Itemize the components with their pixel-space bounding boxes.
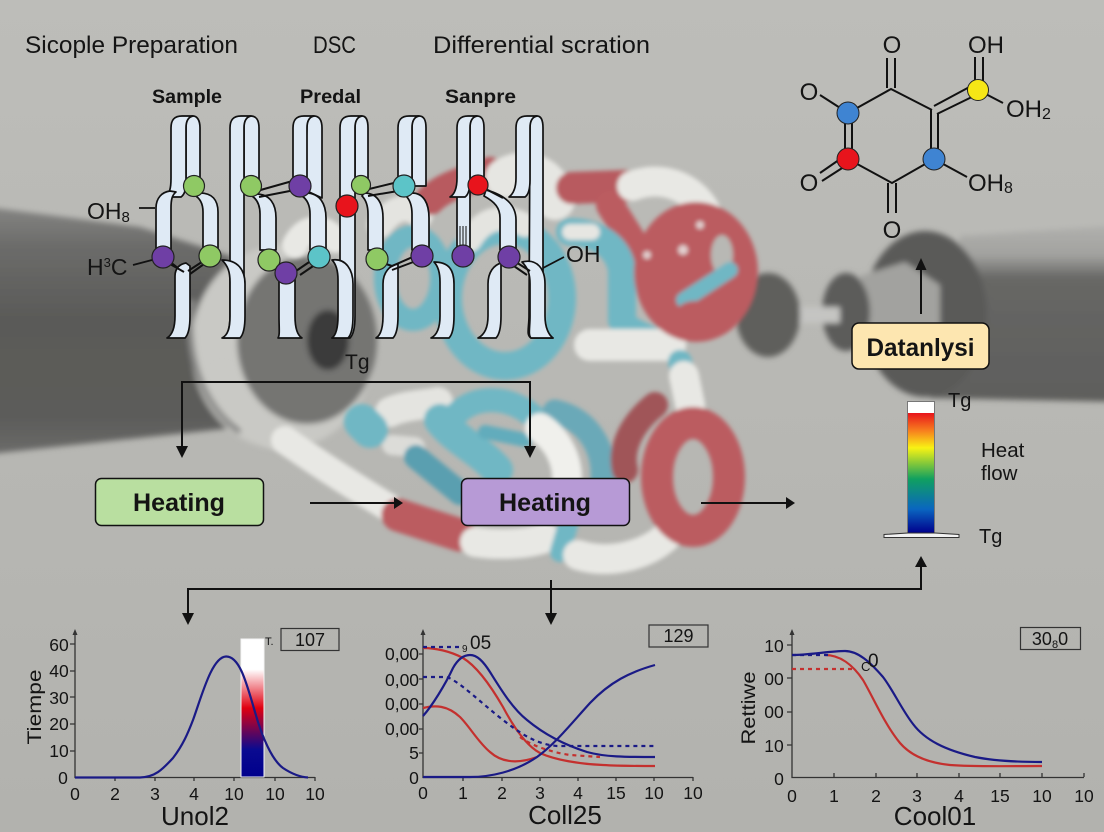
label: Tg bottom: Tg — [979, 526, 1002, 548]
label: O bottom: O — [883, 217, 901, 244]
label: Tg centre: Tg — [345, 351, 370, 374]
atoms — [152, 175, 520, 284]
curve — [75, 656, 308, 778]
y tick labels: 0 — [409, 768, 419, 788]
y tick labels: 40 — [49, 661, 69, 681]
x tick labels — [418, 783, 703, 803]
y axis title: Rettiwe — [739, 672, 760, 744]
y tick labels: 20 — [49, 714, 69, 734]
x tick labels: 3 — [150, 784, 160, 804]
box: heating green — [96, 478, 264, 526]
chart 2: Coll25 — [385, 625, 708, 830]
column base — [884, 533, 959, 538]
label: OH2 right: 2 — [1042, 106, 1051, 123]
y tick labels — [49, 635, 69, 788]
label: OH group left: OH — [87, 198, 122, 224]
heading row — [25, 32, 650, 59]
y tick labels: 10 — [764, 636, 784, 656]
x tick labels: 10 — [305, 784, 325, 804]
x tick labels: 4 — [573, 783, 583, 803]
label: OH group right: OH — [566, 241, 600, 267]
label: H3C group: H — [87, 254, 104, 280]
top strands — [164, 116, 553, 338]
box: heating green: Heating — [133, 489, 225, 517]
x tick labels: 4 — [954, 786, 964, 806]
y tick labels: 10 — [764, 736, 784, 756]
value box 107 — [281, 628, 339, 650]
value box 3080 — [1020, 628, 1080, 651]
y tick labels — [764, 636, 784, 789]
x tick labels: 10 — [224, 784, 244, 804]
curves — [792, 651, 1042, 762]
label: OH3 lower right: OH — [968, 170, 1004, 197]
value box 3080: 8 — [1052, 639, 1058, 651]
x tick labels: 10 — [1032, 786, 1052, 806]
box: heating purple: Heating — [499, 489, 591, 517]
y tick labels: 0 — [58, 768, 68, 788]
x tick labels: 3 — [535, 783, 545, 803]
x tick labels: 15 — [606, 783, 626, 803]
x tick labels: 1 — [829, 786, 839, 806]
box: heating purple — [462, 478, 630, 526]
value box 129: 129 — [663, 626, 694, 646]
box: data analysis: Datanlysi — [866, 334, 974, 362]
arrow: green heating to purple heating — [310, 497, 403, 509]
axes — [419, 632, 693, 781]
annotation C: C — [861, 659, 870, 674]
x tick labels: 10 — [644, 783, 664, 803]
label: OH3 lower right: 8 — [1004, 180, 1013, 197]
x axis title: Unol2 — [161, 801, 229, 831]
label: heat flow: flow — [981, 462, 1018, 485]
x tick labels: 10 — [683, 783, 703, 803]
chart 3: Cool01 — [739, 628, 1094, 831]
annotation 05: 05 — [470, 633, 491, 654]
x tick labels: 4 — [189, 784, 199, 804]
label: heat flow: Heat — [981, 439, 1024, 462]
y tick labels: 0,00 — [385, 670, 419, 690]
atoms — [837, 102, 859, 124]
heading: differential scration: Differential scration — [433, 32, 650, 59]
value box 107: 107 — [295, 630, 325, 650]
marker T.: T. — [265, 636, 274, 648]
label: sample: Sample — [152, 87, 222, 108]
label: O left: O — [800, 79, 818, 106]
annotation small 9: 9 — [462, 644, 468, 655]
y tick labels — [385, 644, 419, 788]
x tick labels: 0 — [787, 786, 797, 806]
x tick labels: 2 — [871, 786, 881, 806]
label: H3C group: 3 — [104, 255, 111, 270]
heading: sample preparation: Sicople Preparation — [25, 32, 238, 59]
flow connector: bottom rail to charts — [182, 556, 927, 625]
y tick labels: 0 — [774, 769, 784, 789]
value box 3080: 30 — [1032, 629, 1052, 649]
label: sanpre: Sanpre — [445, 87, 516, 108]
chart 1: Unol2 — [25, 628, 339, 831]
x tick labels: 3 — [912, 786, 922, 806]
heat flow colour column — [884, 390, 1025, 548]
value box 129 — [649, 625, 708, 647]
bonds — [820, 57, 1003, 213]
y tick labels: 00 — [764, 702, 784, 722]
background: right instrument cylinder — [736, 225, 1104, 402]
label: OH2 right: OH — [1006, 96, 1042, 123]
axes — [70, 632, 315, 781]
arrow: purple heating to heat flow — [701, 497, 795, 509]
y tick labels: 00 — [764, 669, 784, 689]
y tick labels: 30 — [49, 688, 69, 708]
value box 3080: 0 — [1058, 629, 1068, 649]
y tick labels: 5 — [409, 743, 419, 763]
label: Tg top: Tg — [948, 390, 971, 412]
x axis title: Coll25 — [528, 800, 602, 830]
x tick labels: 0 — [70, 784, 80, 804]
ring molecule structure — [800, 32, 1051, 244]
gradient bar — [241, 639, 264, 777]
curves — [423, 648, 655, 766]
background: left instrument cylinder — [0, 206, 377, 455]
x tick labels: 10 — [265, 784, 285, 804]
ribbon molecule diagram — [87, 116, 600, 338]
background: blurred polymer loops — [222, 172, 758, 559]
axes — [787, 632, 1084, 778]
label: O lower left: O — [800, 170, 818, 197]
x axis title: Cool01 — [894, 801, 976, 831]
y tick labels: 10 — [49, 741, 69, 761]
y tick labels: 0,00 — [385, 719, 419, 739]
arrow: data analysis up to molecule — [916, 258, 926, 314]
x tick labels: 0 — [418, 783, 428, 803]
label: OH group left: 8 — [122, 209, 130, 226]
y tick labels: 60 — [49, 635, 69, 655]
heading: DSC: DSC — [313, 32, 356, 59]
middle arches — [156, 190, 516, 250]
y tick labels: 0,00 — [385, 694, 419, 714]
x tick labels: 10 — [1074, 786, 1094, 806]
x tick labels: 1 — [458, 783, 468, 803]
y axis title: Tiempe — [25, 670, 46, 744]
x tick labels: 2 — [110, 784, 120, 804]
sub-labels above ribbons — [152, 87, 516, 108]
flow connector: Tg to heating boxes — [176, 382, 536, 458]
label: predal: Predal — [300, 87, 361, 108]
label: H3C group: C — [111, 254, 127, 280]
colour bar — [908, 402, 934, 534]
atom labels: O — [883, 32, 901, 59]
x tick labels: 15 — [990, 786, 1010, 806]
bottom strands — [167, 260, 553, 338]
x tick labels — [70, 784, 325, 804]
annotation 0: 0 — [868, 651, 879, 672]
box: data analysis — [852, 323, 989, 369]
bond lines — [133, 180, 564, 275]
x tick labels: 2 — [497, 783, 507, 803]
x tick labels — [787, 786, 1094, 806]
label: OH top right: OH — [968, 32, 1004, 59]
y tick labels: 0,00 — [385, 644, 419, 664]
